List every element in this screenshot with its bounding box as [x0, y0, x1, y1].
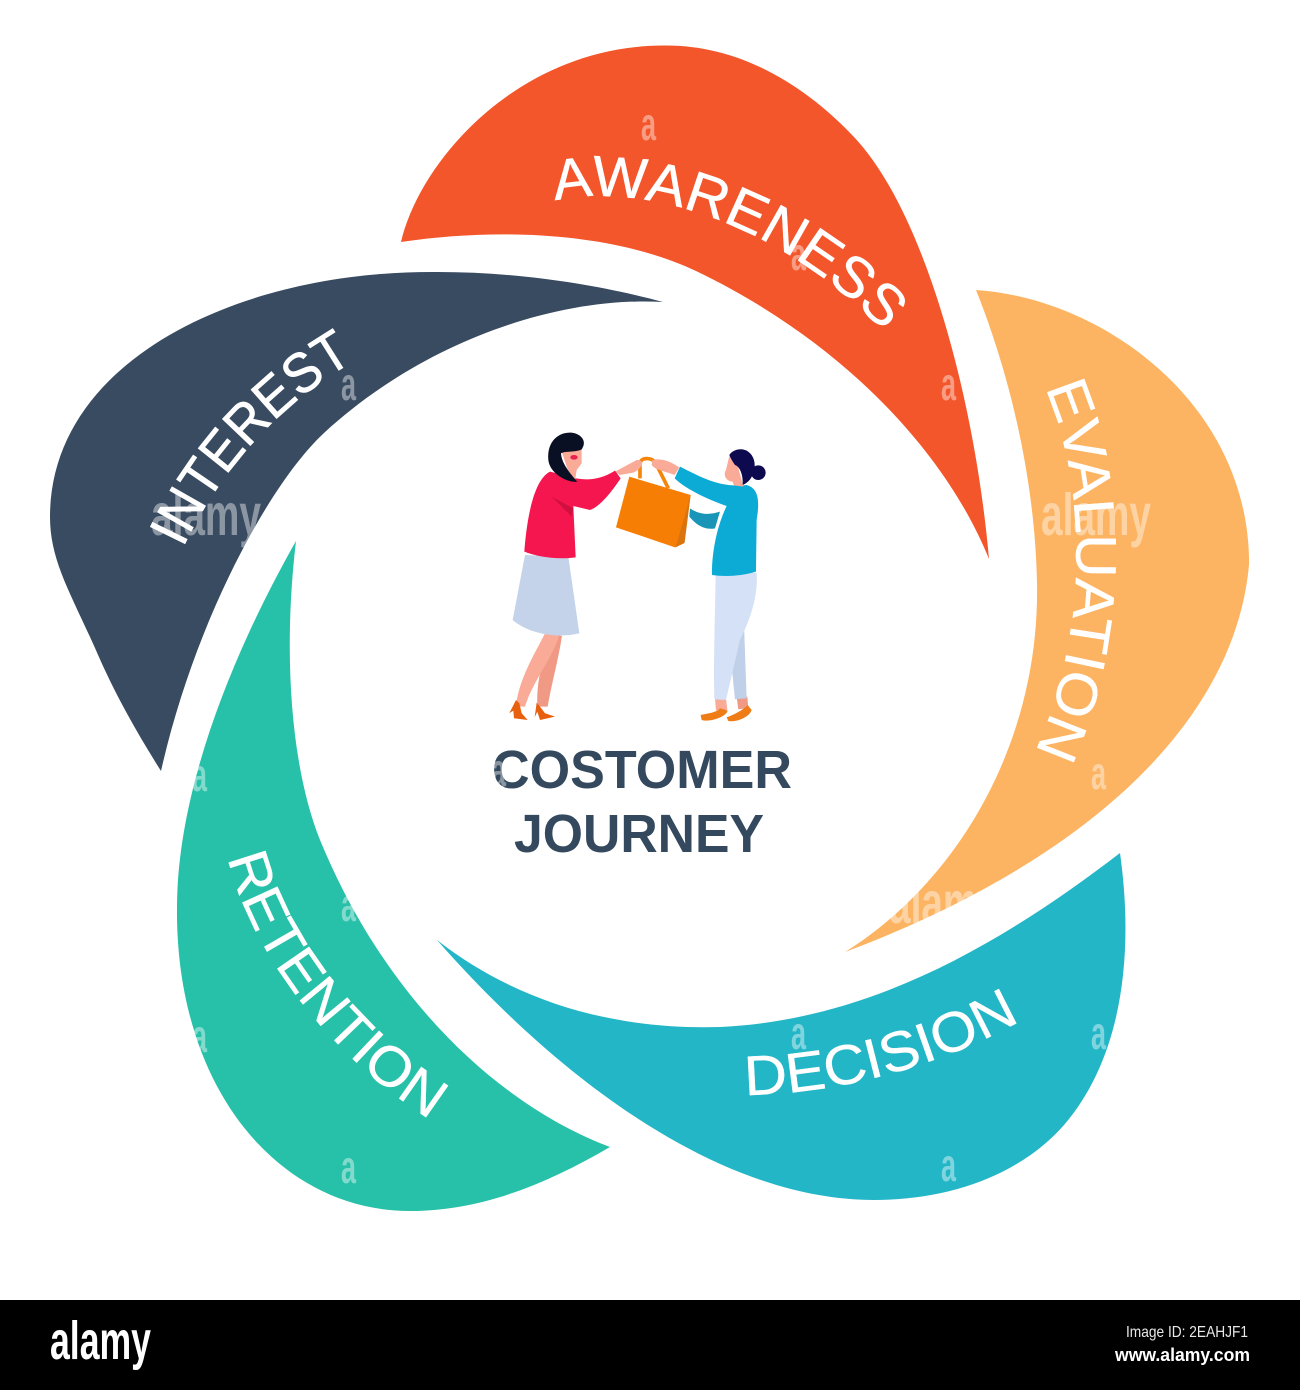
- watermarks: a: [341, 879, 356, 931]
- watermarks: a: [941, 1139, 956, 1191]
- watermarks: a: [941, 358, 956, 410]
- label: interest: INTEREST: [150, 328, 344, 544]
- footer url: www.alamy.com: [1114, 1345, 1250, 1365]
- label: retention: RETENTION: [228, 850, 448, 1118]
- watermarks: a: [192, 1010, 207, 1062]
- petal: interest: [50, 272, 663, 771]
- petal: decision: [437, 853, 1126, 1200]
- title: customer journey: JOURNEY: [514, 804, 764, 864]
- footer image id: Image ID: 2EAHJF1: [1126, 1324, 1248, 1341]
- title: customer journey: COSTOMER: [492, 740, 792, 800]
- shopping bag: [616, 459, 691, 547]
- watermarks: a: [1091, 1007, 1106, 1059]
- watermarks: alamy: [1041, 482, 1151, 548]
- footer logo: alamy: [50, 1311, 151, 1371]
- watermarks: a: [192, 749, 207, 801]
- watermarks: a: [641, 98, 656, 150]
- right woman: [652, 449, 766, 721]
- watermarks: a: [341, 1141, 356, 1193]
- illustration: two women with shopping bag: [509, 433, 766, 721]
- watermarks: alamy: [151, 482, 261, 548]
- label: awareness: AWARENESS: [554, 156, 905, 326]
- watermarks: a: [791, 228, 806, 280]
- petal: retention: [176, 541, 610, 1211]
- title: customer journey: [492, 740, 792, 864]
- watermarks: a: [341, 358, 356, 410]
- watermarks: [151, 98, 1151, 1193]
- left woman: [509, 433, 642, 720]
- label: decision: DECISION: [748, 988, 1016, 1096]
- watermarks: a: [491, 744, 506, 796]
- footer bar: [0, 1300, 1300, 1390]
- watermarks: a: [791, 1007, 806, 1059]
- petal: evaluation: [845, 290, 1249, 952]
- label: evaluation: EVALUATION: [1037, 378, 1116, 762]
- watermarks: alamy: [889, 870, 999, 936]
- petal: awareness: [401, 46, 989, 559]
- watermarks: a: [1091, 747, 1106, 799]
